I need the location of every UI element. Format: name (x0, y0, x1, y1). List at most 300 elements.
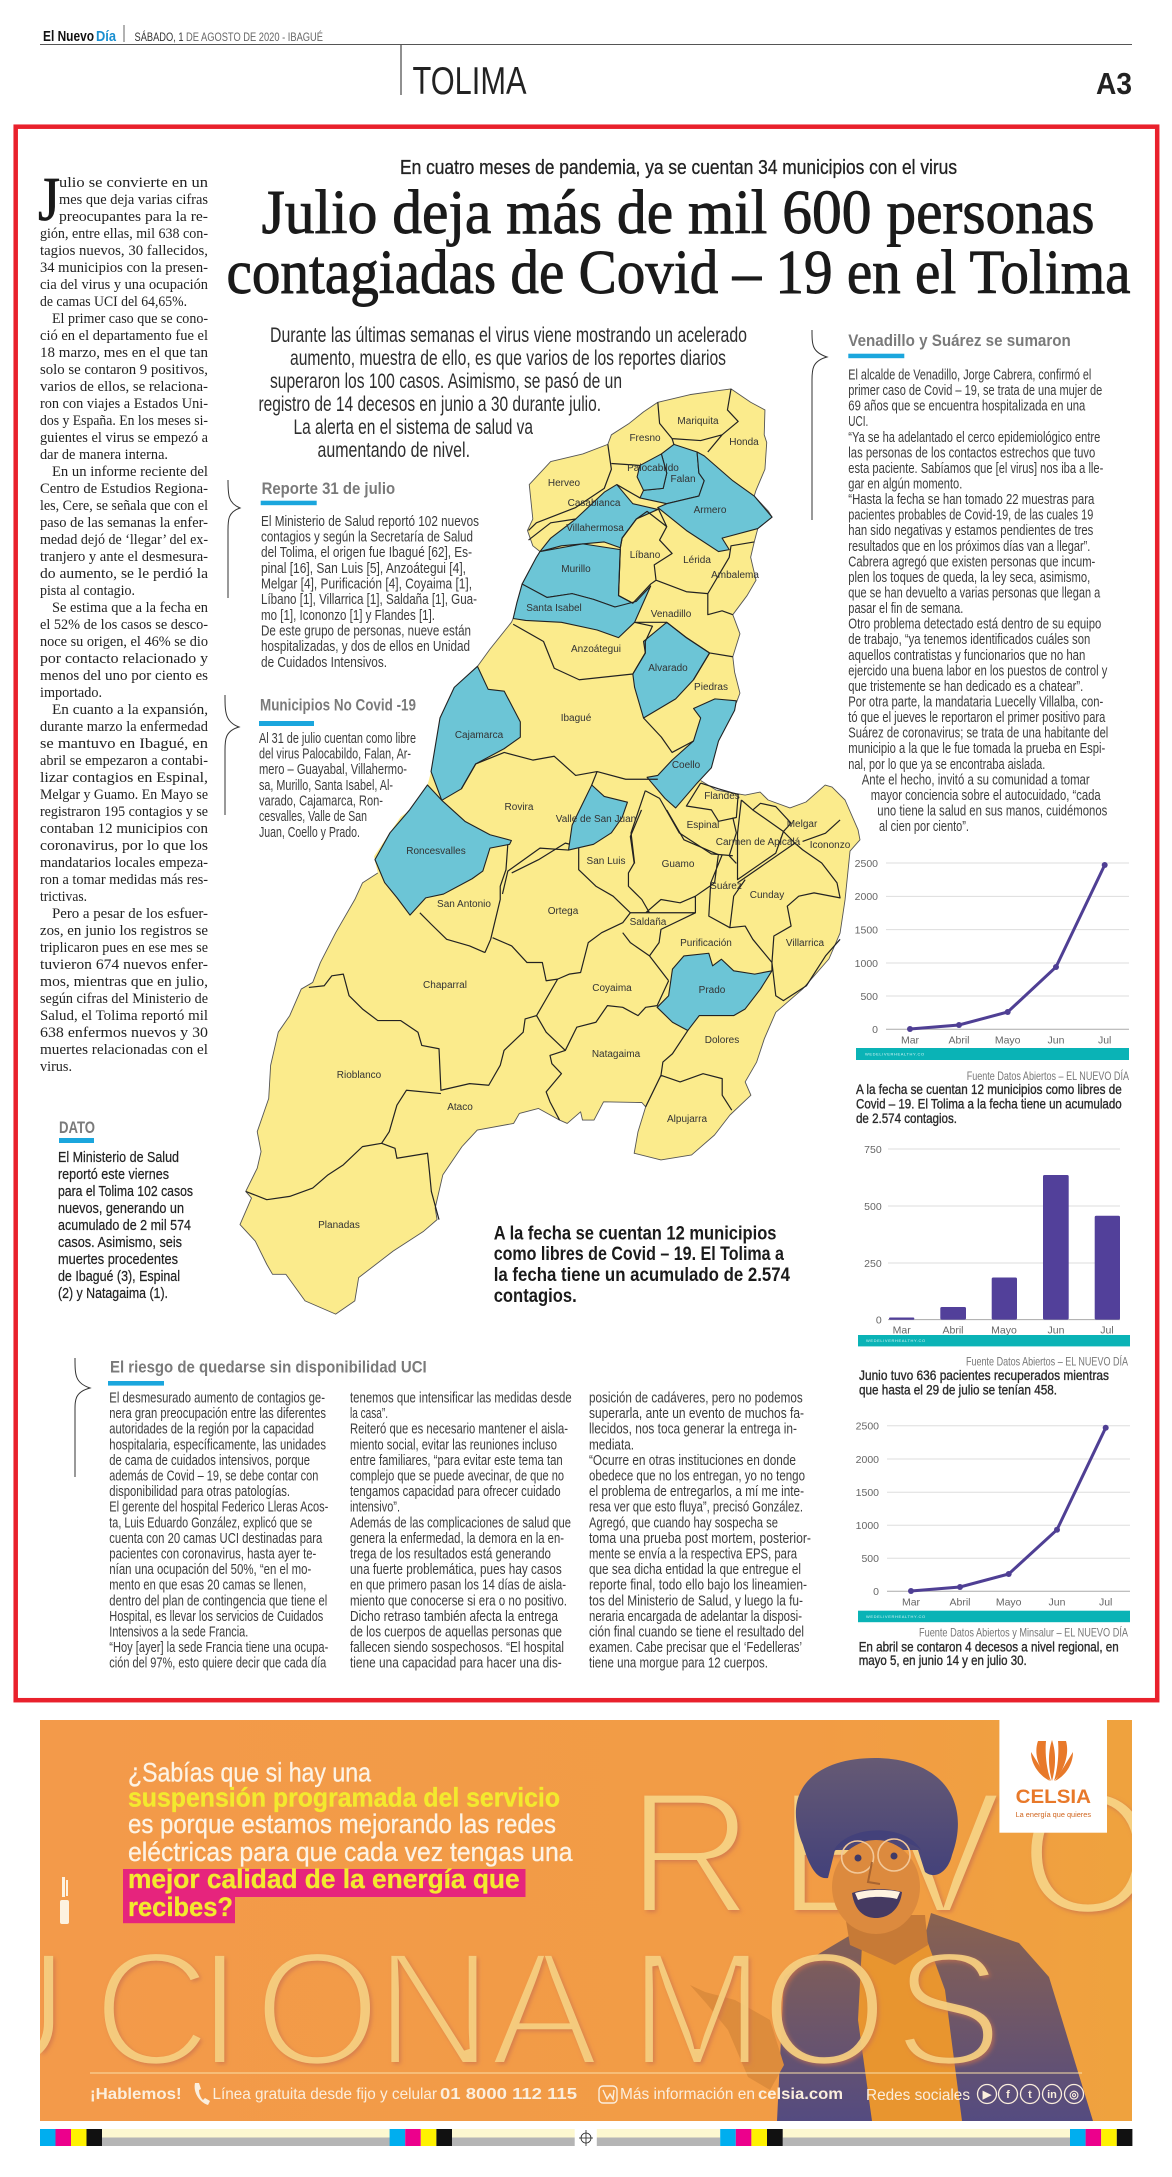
deck paragraph: Durante las últimas semanas el virus viene mostrando un acelerado (270, 324, 747, 347)
left column article text: ció en el departamento fue el (40, 328, 208, 344)
report text: de Cuidados Intensivos. (261, 655, 387, 671)
report text: del Tolima, el origen fue Ibagué [62], Es- (261, 545, 472, 561)
left column article text: Centro de Estudios Regiona- (40, 481, 208, 497)
left column article text: lizar contagios en Espinal, (40, 770, 208, 786)
ad contact footer: ¡Hablemos! (90, 2086, 182, 2103)
axis labels: 750 (864, 1144, 882, 1156)
venadillo text: que se han devuelto a varias personas que llegan a (848, 586, 1101, 602)
caption: chart 2 (859, 1367, 1109, 1397)
municipality labels: Icononzo (810, 840, 851, 851)
report text (261, 514, 479, 671)
left column article text: do aumento, se le perdió la (40, 566, 208, 582)
venadillo text: al cien por ciento”. (879, 819, 969, 835)
left column article text: pista al contagio. (40, 583, 135, 599)
left column article text (40, 175, 209, 1075)
masthead logo: El Nuevo (43, 28, 94, 45)
deck paragraph: aumento, muestra de ello, es que varios de los reportes diarios (290, 347, 726, 370)
map south section (240, 780, 860, 1314)
municipality labels: Piedras (694, 682, 728, 693)
teal footer bar (858, 1611, 1130, 1622)
text column 1: Intensivos a la sede Francia. (109, 1624, 248, 1640)
blue municipalities (375, 444, 772, 915)
municipality labels: Herveo (548, 478, 581, 489)
municipality labels: Espinal (687, 820, 719, 831)
text column 2: miento que conocerse si era o no positivo. (350, 1593, 567, 1609)
text column 2: en que primero pasan los 14 días de aisla- (350, 1578, 566, 1594)
left column article text: el 52% de los casos se desco- (40, 617, 208, 633)
banner background (40, 1720, 1132, 2121)
venadillo text: gar en algún momento. (848, 476, 962, 492)
ad headline (123, 1758, 573, 1923)
axis labels: 1000 (855, 958, 878, 970)
dato text (58, 1149, 193, 1302)
text column 1: nían una ocupación del 50%, “en el mo- (109, 1562, 311, 1578)
municipality labels: Ambalema (711, 570, 759, 581)
text column 1: ta, Luis Eduardo González, explicó que se (109, 1515, 312, 1531)
large word row 1 (644, 1796, 1132, 1916)
ad contact footer (90, 2083, 1084, 2105)
municipality labels: Roncesvalles (406, 846, 466, 857)
left column article text: ulio se convierte en un (59, 175, 209, 191)
left column article text: virus. (40, 1059, 72, 1075)
masthead logo: Día (96, 28, 117, 45)
left column article text: medad dejó de ‘llegar’ del ex- (40, 532, 208, 548)
text column 2: miento social, evitar las reuniones incluso (350, 1437, 557, 1453)
text column 3: tiene una morgue para 12 cuerpos. (589, 1656, 768, 1672)
left column article text: dos y España. En los meses si- (40, 413, 208, 429)
title (226, 179, 1130, 307)
text column 1: de cama de cuidados intensivos, porque (109, 1453, 310, 1469)
text column 2: fallecen siendo sospechosos. “El hospital (350, 1640, 564, 1656)
municipios text: sa, Murillo, Santa Isabel, Al- (259, 778, 393, 794)
left column article text: menos del uno por ciento es (40, 668, 208, 684)
chart: recovered patients bar chart: WEDELIVERHEALTHY.CO (866, 1338, 926, 1343)
text column 2: una fuerte problemática, pues hay casos (350, 1562, 562, 1578)
text column 2: Además de las complicaciones de salud que (350, 1515, 571, 1531)
left column article text: de camas UCI del 64,65%. (40, 294, 187, 310)
ad headline: recibes? (128, 1892, 233, 1922)
deck paragraph: La alerta en el sistema de salud va (294, 416, 533, 439)
venadillo text: pacientes probables de Covid-19, de las cuales 19 (848, 508, 1093, 524)
left column article text: En un informe reciente del (52, 464, 208, 480)
municipality labels: Armero (694, 505, 727, 516)
venadillo text: uno tiene la salud en sus manos, cuidémonos (877, 804, 1107, 820)
brace: riesgo UCI (75, 1358, 90, 1477)
text column 2: trega de los resultados está generando (350, 1546, 551, 1562)
municipality labels: Alpujarra (667, 1114, 707, 1125)
text column 2: Reiteró que es necesario mantener el aisla- (350, 1422, 568, 1438)
left column article text: varios de ellos, se relaciona- (40, 379, 208, 395)
text column 1: Hospital, es llevar los servicios de Cuidados (109, 1609, 323, 1625)
text column 1: mento en que esas 20 camas se llenen, (109, 1578, 306, 1594)
left column article text: abril se empezaron a contabi- (40, 753, 208, 769)
report text: El Ministerio de Salud reportó 102 nuevos (261, 514, 479, 530)
heading: Venadillo y Suárez se sumaron (848, 331, 1071, 350)
ad headline: suspensión programada del servicio (128, 1783, 560, 1813)
left column article text: tagios nuevos, 30 fallecidos, (40, 243, 208, 259)
data line (907, 862, 1108, 1032)
municipios text: Juan, Coello y Prado. (259, 825, 360, 841)
icon: whatsapp (599, 2086, 617, 2103)
axis labels: 2000 (855, 891, 878, 903)
venadillo text: resultados que en los próximos días van a llegar”. (848, 539, 1090, 555)
municipality labels: Anzoátegui (571, 644, 621, 655)
text column 2: tenemos que intensificar las medidas desde (350, 1390, 572, 1406)
dato text: de Ibagué (3), Espinal (58, 1268, 180, 1285)
panel: venadillo y suárez (848, 331, 1108, 835)
left column article text: preocupantes para la re- (59, 209, 208, 225)
text column 2: intensivo”. (350, 1500, 400, 1516)
celsia logo box: La energía que quieres (1016, 1812, 1092, 1819)
left column article text: contaban 12 municipios con (40, 821, 208, 837)
chart: accumulated cases line chart: WEDELIVERHEALTHY.CO (865, 1052, 925, 1056)
municipality labels: Prado (699, 985, 726, 996)
ad headline: mejor calidad de la energía que (128, 1864, 520, 1894)
venadillo text: Otro problema detectado está dentro de su equipo (848, 617, 1101, 633)
kicker: En cuatro meses de pandemia, ya se cuentan 34 municipios con el virus (400, 157, 957, 179)
venadillo text: Por otra parte, la mandataria Luecelly Villalba, con- (848, 694, 1103, 710)
left column article text: ron con viajes a Estados Uni- (40, 396, 208, 412)
left column article text: guientes el virus se empezó a (40, 430, 208, 446)
venadillo text: las personas de los contactos estrechos que tuvo (848, 445, 1095, 461)
report text: Melgar [4], Purificación [4], Coyaima [1], (261, 576, 472, 592)
municipality labels: Ibagué (561, 713, 592, 724)
text column 3: examen. Cabe precisar que el ‘Fedelleras’ (589, 1640, 802, 1656)
venadillo text: Ante el hecho, invitó a su comunidad a tomar (862, 772, 1090, 788)
heading: Municipios No Covid -19 (260, 696, 416, 715)
text column 1: “Hoy [ayer] la sede Francia tiene una ocupa- (109, 1640, 328, 1656)
municipality labels: Alvarado (648, 663, 688, 674)
dato text: reportó este viernes (58, 1166, 169, 1183)
text column 2: genera la enfermedad, la demora en la en- (350, 1531, 564, 1547)
chart: recovered patients bar chart (858, 1144, 1130, 1369)
text column 2: la casa”. (350, 1406, 388, 1422)
municipality labels: Natagaima (592, 1049, 641, 1060)
deck paragraph (258, 324, 747, 462)
celsia logo box: CELSIA (1016, 1787, 1091, 1808)
left column article text: Salud, el Tolima reportó mil (40, 1008, 208, 1024)
venadillo text: aquellos contratistas y funcionarios que no han (848, 648, 1085, 664)
left column article text: Pero a pesar de los esfuer- (52, 906, 208, 922)
left column article text: por contacto relacionado y (40, 651, 209, 667)
axis labels (855, 858, 1111, 1047)
panel: dato (58, 1118, 193, 1302)
ad headline: eléctricas para que cada vez tengas una (128, 1837, 573, 1867)
municipality labels: Líbano (630, 550, 661, 561)
ad contact footer: ▶ (982, 2089, 992, 2101)
left column article text: cia del virus y una ocupación (40, 277, 208, 293)
left column article text: mos, mientras que en julio, (40, 974, 208, 990)
large word row 2 (40, 1954, 996, 2068)
caption: chart 1: A la fecha se cuentan 12 municipios como libres de (856, 1081, 1122, 1097)
heading: El riesgo de quedarse sin disponibilidad UCI (110, 1358, 427, 1377)
map callout: contagios. (494, 1285, 577, 1307)
municipios text: varado, Cajamarca, Ron- (259, 794, 383, 810)
left column article text: tranjero y ante el desmesura- (40, 549, 208, 565)
person with afro hair and glasses (690, 1758, 1093, 2121)
report text: hospitalizadas, y dos de ellos en Unidad (261, 639, 470, 655)
axis labels: Abril (949, 1597, 971, 1609)
text column 3: el problema de entregarlos, a mí me inte- (589, 1484, 804, 1500)
text column 3: mediata. (589, 1437, 634, 1453)
municipality labels: Carmen de Apicalá (716, 837, 801, 848)
text column 1: dentro del plan de contingencia que tiene el (109, 1593, 327, 1609)
red frame panel (16, 127, 1157, 1700)
axis labels: Jun (1049, 1597, 1066, 1609)
axis labels: 250 (864, 1258, 882, 1270)
axis labels: 0 (876, 1314, 882, 1326)
ad contact footer: in (1047, 2089, 1057, 2101)
municipality labels: Coyaima (592, 983, 632, 994)
bars (889, 1175, 1120, 1320)
axis labels: Jul (1098, 1035, 1111, 1047)
axis labels: Mar (893, 1325, 911, 1337)
text column 3: resa ver que esto fluya”, precisó González. (589, 1500, 803, 1516)
dato text: (2) y Natagaima (1). (58, 1285, 168, 1302)
data line (908, 1425, 1109, 1594)
ad contact footer: ◎ (1069, 2089, 1079, 2101)
axis labels (856, 1420, 1112, 1609)
venadillo text: esta paciente. Sabíamos que [el virus] nos iba a lle- (848, 461, 1103, 477)
left column article text: El primer caso que se cono- (52, 311, 208, 327)
venadillo text: 69 años que se encuentra hospitalizada en una (848, 399, 1086, 415)
text column 1: disponibilidad para otras patologías. (109, 1484, 290, 1500)
teal footer bar (856, 1048, 1129, 1060)
report text: contagios y según la Secretaría de Salud (261, 530, 473, 546)
axis labels: Jul (1100, 1325, 1114, 1337)
left column article text: 638 enfermos nuevos y 30 (40, 1025, 208, 1041)
left column article text: Se estima que a la fecha en (52, 600, 208, 616)
left column article text: 18 marzo, mes en el que tan (40, 345, 208, 361)
dato text: para el Tolima 102 casos (58, 1183, 193, 1200)
municipality labels: Murillo (561, 564, 591, 575)
venadillo text: municipio a la que le fue tomada la prueba en Espi- (848, 741, 1105, 757)
axis labels: 500 (860, 991, 878, 1003)
municipality labels: Suárez (710, 881, 742, 892)
printer colour registration bar (40, 2129, 1132, 2146)
newspaper header (40, 25, 1132, 103)
municipios text: mero – Guayabal, Villahermo- (259, 762, 407, 778)
deck paragraph: aumentando de nivel. (318, 439, 470, 462)
text column 1: cuenta con 20 camas UCI destinadas para (109, 1531, 323, 1547)
left column article text: muertes relacionadas con el (40, 1042, 208, 1058)
map of Tolima municipalities (240, 389, 860, 1314)
icons: social networks (978, 2084, 1084, 2104)
dato text: El Ministerio de Salud (58, 1149, 179, 1166)
left column article text: les, Cere, se señala que con el (40, 498, 208, 514)
dato text: acumulado de 2 mil 574 (58, 1217, 191, 1234)
axis labels: 1000 (856, 1520, 879, 1532)
venadillo text: “Hasta la fecha se han tomado 22 muestras para (848, 492, 1095, 508)
venadillo text: de trabajo, “ya tenemos identificados cuáles son (848, 632, 1090, 648)
deck paragraph: superaron los 100 casos. Asimismo, se pasó de un (270, 370, 622, 393)
map callout: A la fecha se cuentan 12 municipios (494, 1222, 777, 1244)
axis labels: Jun (1048, 1035, 1065, 1047)
venadillo text (848, 368, 1108, 835)
page number: A3 (1096, 66, 1132, 101)
venadillo text: nal, por lo que ya se encontraba aislada. (848, 757, 1045, 773)
ad contact footer: f (1006, 2089, 1010, 2101)
left column article text: durante marzo la enfermedad (40, 719, 208, 735)
report text: Líbano [1], Villarrica [1], Saldaña [1], Gua- (261, 592, 477, 608)
text column 2: Dicho retraso también afecta la entrega (350, 1609, 559, 1625)
text column 2: de los cuerpos de aquellas personas que (350, 1624, 562, 1640)
municipality labels: Villarrica (786, 938, 825, 949)
map callout: como libres de Covid – 19. El Tolima a (494, 1243, 784, 1265)
municipality labels: Ortega (548, 906, 579, 917)
text column 3: que sea dicha entidad la que entregue el (589, 1562, 801, 1578)
chart: accumulated cases line chart (855, 858, 1129, 1083)
axis labels: Mayo (996, 1597, 1022, 1609)
advertisement banner (40, 1720, 1132, 2121)
municipality labels: Flandes (704, 791, 740, 802)
text column 1: El gerente del hospital Federico Lleras Acos- (109, 1500, 328, 1516)
left column article text: paso de las semanas la enfer- (40, 515, 208, 531)
text column 3: obedece que no los entregan, yo no tengo (589, 1468, 805, 1484)
axis labels: Abril (942, 1325, 964, 1337)
left column article text: ron a tomar medidas más res- (40, 872, 208, 888)
ad contact footer: 01 8000 112 115 (440, 2086, 577, 2103)
municipality labels: Ataco (447, 1102, 473, 1113)
text column 3: llecidos, nos toca generar la entrega in- (589, 1422, 797, 1438)
caption: chart 2: Junio tuvo 636 pacientes recuperados mientras (859, 1367, 1109, 1383)
text column 3: reporte final, todo ello bajo los lineamien- (589, 1578, 807, 1594)
text column 2: tengamos capacidad para ofrecer cuidado (350, 1484, 561, 1500)
text column 3: mente se envía a la respectiva EPS, para (589, 1546, 798, 1562)
text column 1: El desmesurado aumento de contagios ge- (109, 1390, 325, 1406)
venadillo text: El alcalde de Venadillo, Jorge Cabrera, confirmó el (848, 368, 1091, 384)
left column article text: mes que deja varias cifras (59, 192, 208, 208)
municipality labels: Dolores (705, 1035, 739, 1046)
left column article text: gión, entre ellas, mil 638 con- (40, 226, 208, 242)
map callout: la fecha tiene un acumulado de 2.574 (494, 1264, 790, 1286)
axis labels: 0 (872, 1024, 878, 1036)
brace: reporte (228, 480, 240, 598)
map callout (494, 1222, 790, 1307)
municipality labels: Valle de San Juan (556, 814, 636, 825)
axis labels: Mayo (991, 1325, 1017, 1337)
text column 2 (350, 1390, 572, 1672)
caption: chart 1: Covid – 19. El Tolima a la fecha tiene un acumulado (856, 1096, 1122, 1112)
axis labels: Jun (1048, 1325, 1065, 1337)
ad headline: es porque estamos mejorando las redes (128, 1809, 556, 1839)
venadillo text: “Ya se ha adelantado el cerco epidemiológico entre (848, 430, 1100, 446)
text column 3 (589, 1390, 811, 1672)
text column 1: ción del 97%, esto quiere decir que cada día (109, 1656, 327, 1672)
municipality labels: Villahermosa (566, 523, 624, 534)
drop cap: J (38, 166, 60, 234)
municipality labels: Cunday (750, 890, 784, 901)
left column article text: En cuanto a la expansión, (52, 702, 208, 718)
municipality labels: Guamo (662, 859, 695, 870)
text column 1 (109, 1390, 328, 1672)
ad contact footer: Línea gratuita desde fijo y celular (212, 2086, 438, 2103)
text column 3: posición de cadáveres, pero no podemos (589, 1390, 803, 1406)
panel: el riesgo de quedarse sin disponibilidad UCI (108, 1358, 811, 1672)
ad headline: ¿Sabías que si hay una (128, 1758, 372, 1788)
text column 3: Agregó, que cuando hay sospecha se (589, 1515, 778, 1531)
section name: TOLIMA (412, 60, 526, 103)
ad contact footer: t (1028, 2089, 1032, 2101)
municipality labels: Purificación (680, 938, 732, 949)
teal footer bar (858, 1335, 1130, 1346)
municipios text: cesvalles, Valle de San (259, 809, 367, 825)
municipality labels: Fresno (629, 433, 661, 444)
left column article text: noce su origen, el 46% se dio (40, 634, 208, 650)
text column 3: superarla, ante un evento de muchos fa- (589, 1406, 804, 1422)
celsia logo box (999, 1720, 1107, 1833)
map north section (375, 389, 772, 915)
axis labels: 500 (861, 1553, 879, 1565)
venadillo text: pasar el fin de semana. (848, 601, 963, 617)
left column article text: Melgar y Guamo. En Mayo se (40, 787, 208, 803)
municipality labels: San Antonio (437, 899, 491, 910)
left column article text: 34 municipios con la presen- (40, 260, 208, 276)
ad contact footer: Más información en (620, 2086, 755, 2103)
municipality labels: Rovira (505, 802, 534, 813)
left column article text: triplicaron pues en ese mes se (40, 940, 208, 956)
axis labels: 2500 (856, 1420, 879, 1432)
left column article text: solo se contaron 9 positivos, (40, 362, 208, 378)
left column article text: tuvieron 674 nuevos enfer- (40, 957, 208, 973)
venadillo text: han sido negativas y estamos pendientes de tres (848, 523, 1093, 539)
text column 2: entre familiares, “para evitar este tema tan (350, 1453, 563, 1469)
chart: deaths line chart: WEDELIVERHEALTHY.CO (866, 1614, 926, 1619)
caption: chart 3 (859, 1639, 1119, 1668)
municipality labels: Rioblanco (337, 1070, 382, 1081)
municipios text (259, 731, 416, 841)
caption: chart 3: En abril se contaron 4 decesos a nivel regional, en (859, 1639, 1119, 1655)
logo shell icon (1031, 1740, 1073, 1781)
vertical mini logo (60, 1877, 69, 1924)
axis labels (864, 1144, 1114, 1337)
heading: Reporte 31 de julio (262, 479, 395, 498)
text column 3: neraria encargada de adelantar la disposi- (589, 1609, 802, 1625)
venadillo text: Cabrera agregó que existen personas que incum- (848, 554, 1095, 570)
municipality labels: Mariquita (677, 416, 719, 427)
municipality labels: Chaparral (423, 980, 467, 991)
text column 3: toma una prueba post mortem, posterior- (589, 1531, 811, 1547)
title: Julio deja más de mil 600 personas (262, 179, 1095, 247)
axis labels: 500 (864, 1201, 882, 1213)
municipality labels: Honda (729, 437, 759, 448)
panel: municipios no covid (259, 696, 416, 841)
left column article text: importado. (40, 685, 102, 701)
left column article text: según cifras del Ministerio de (40, 991, 208, 1007)
chart: deaths line chart (856, 1420, 1130, 1640)
text column 3: ción final cuando se tiene el resultado del (589, 1624, 804, 1640)
municipality labels: Palocabildo (627, 463, 679, 474)
axis labels: 1500 (856, 1487, 879, 1499)
text column 1: además de Covid – 19, se debe contar con (109, 1468, 318, 1484)
axis labels: 1500 (855, 924, 878, 936)
left column article text: trictivas. (40, 889, 87, 905)
municipios text: Al 31 de julio cuentan como libre (259, 731, 416, 747)
report text: De este grupo de personas, nueve están (261, 624, 471, 640)
brace: municipios (225, 695, 239, 815)
text column 1: autoridades de la región por la capacidad (109, 1422, 314, 1438)
venadillo text: plen los toques de queda, la ley seca, asimismo, (848, 570, 1090, 586)
text column 2: tiene una capacidad para hacer una dis- (350, 1656, 562, 1672)
municipality labels: Coello (672, 760, 701, 771)
municipality labels: Planadas (318, 1220, 360, 1231)
ad contact footer: Redes sociales (866, 2087, 970, 2104)
text column 3: “Ocurre en otras instituciones en donde (589, 1453, 796, 1469)
venadillo text: que tristemente se han dedicado es a chatear”. (848, 679, 1083, 695)
ad contact footer: celsia.com (758, 2086, 843, 2103)
axis labels: Mar (901, 1035, 920, 1047)
dato text: casos. Asimismo, seis (58, 1234, 182, 1251)
